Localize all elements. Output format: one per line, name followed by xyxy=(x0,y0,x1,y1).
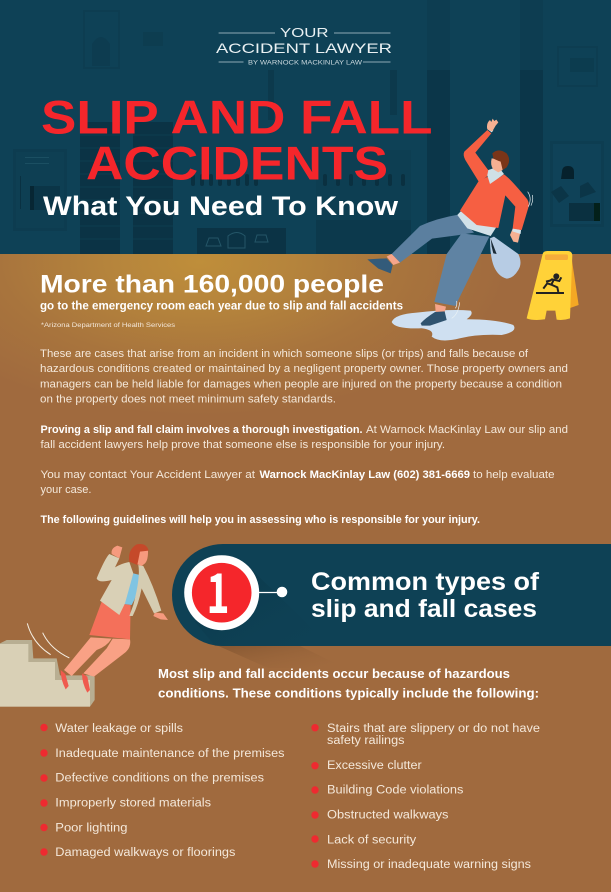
heading: statistic: More than 160,000 people xyxy=(40,270,384,298)
text block: contact: to help evaluate xyxy=(473,469,554,481)
text block: intro: hazardous conditions created or maintained by a negligent property owner. Those property owners and xyxy=(40,363,568,375)
list: right column: Stairs that are slippery or do not have xyxy=(327,723,540,735)
text block: proving a claim: Proving a slip and fall claim involves a thorough investigation. xyxy=(40,424,362,436)
text block: proving a claim: fall accident lawyers help prove that someone else is responsible for your injury. xyxy=(40,439,445,451)
list: left column: Poor lighting xyxy=(55,822,127,834)
panel: floor xyxy=(0,254,611,892)
text block: intro: managers can be held liable for damages when people are injured on the property because a condition xyxy=(40,378,562,390)
list: right column xyxy=(311,723,540,871)
text block: proving a claim xyxy=(40,424,568,451)
list: right column: Lack of security xyxy=(327,834,416,846)
banner shadow xyxy=(205,640,345,668)
list: left column: Water leakage or spills xyxy=(55,723,183,735)
section heading: slip and fall cases xyxy=(311,595,537,623)
text block: proving a claim: At Warnock MacKinlay Law our slip and xyxy=(366,424,568,436)
subtitle: What You Need To Know xyxy=(43,191,399,221)
illustration: stairs xyxy=(0,623,95,707)
list: left column: Defective conditions on the premises xyxy=(55,772,264,784)
connector line xyxy=(256,592,282,594)
text block: contact: Warnock MacKinlay Law (602) 381-6669 xyxy=(260,469,470,481)
list: left column: Damaged walkways or floorings xyxy=(55,847,236,859)
text block: intro xyxy=(40,348,568,406)
text block: guidelines: The following guidelines will help you in assessing who is responsible for your injury. xyxy=(40,514,480,526)
text block: contact xyxy=(40,469,554,496)
logo: ACCIDENT LAWYER xyxy=(216,40,392,56)
list: right column: Missing or inadequate warning signs xyxy=(327,859,531,871)
list: right column: Obstructed walkways xyxy=(327,810,449,822)
icon: wet floor sign xyxy=(527,251,579,320)
list: left column: Improperly stored materials xyxy=(55,798,211,810)
statistic subheading: go to the emergency room each year due to slip and fall accidents xyxy=(40,300,403,312)
text block: contact: You may contact Your Accident Lawyer at xyxy=(40,469,255,481)
number badge: 1 xyxy=(206,549,230,629)
panel: header store background xyxy=(0,0,611,254)
section heading xyxy=(311,568,540,623)
list: left column xyxy=(40,723,285,859)
text block: section lead xyxy=(158,666,539,700)
illustration: puddle xyxy=(392,310,514,340)
section heading: Common types of xyxy=(311,568,540,596)
panel: section 1 banner xyxy=(172,544,611,646)
source note: *Arizona Department of Health Services xyxy=(41,322,176,329)
list: right column: Excessive clutter xyxy=(327,760,422,772)
number badge xyxy=(184,549,259,630)
illustration: falling man xyxy=(367,119,533,326)
list: right column: safety railings xyxy=(327,735,405,747)
title: ACCIDENTS xyxy=(86,136,388,190)
logo xyxy=(216,25,392,66)
title xyxy=(41,90,432,190)
text block: contact: your case. xyxy=(40,484,92,496)
text block: intro: on the property does not meet minimum safety standards. xyxy=(40,394,336,406)
logo: BY WARNOCK MACKINLAY LAW xyxy=(248,60,362,66)
list: right column: Building Code violations xyxy=(327,784,464,796)
illustration: falling woman xyxy=(61,544,168,693)
text block: intro: These are cases that arise from an incident in which someone slips (or trips) and falls because of xyxy=(40,348,529,360)
title: SLIP AND FALL xyxy=(41,90,432,144)
connector dot xyxy=(277,587,287,597)
list: left column: Inadequate maintenance of the premises xyxy=(55,748,285,760)
text block: section lead: Most slip and fall accidents occur because of hazardous xyxy=(158,666,510,681)
text block: section lead: conditions. These conditions typically include the following: xyxy=(158,686,539,700)
logo: YOUR xyxy=(280,25,328,40)
